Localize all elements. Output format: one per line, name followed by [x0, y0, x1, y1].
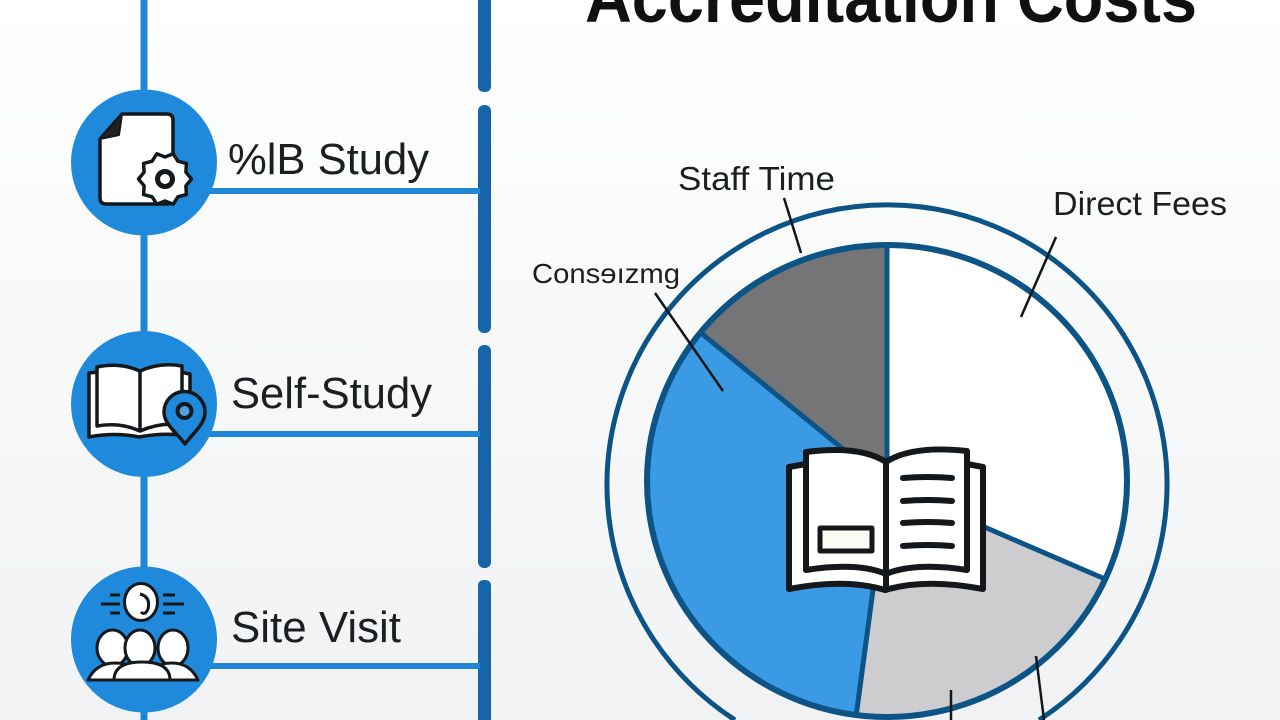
leader lines: [655, 198, 1056, 720]
step label: Site Visit: [231, 603, 401, 652]
icon: open book: [789, 449, 983, 590]
pie slice: light gray: [859, 530, 1102, 714]
icon: document with gear: [100, 114, 192, 204]
slice dividers: [701, 245, 1105, 717]
step label: Self-Study: [231, 369, 432, 418]
connector line: [205, 663, 480, 669]
step label: %lB Study: [228, 135, 429, 184]
step circle: [71, 566, 217, 712]
connector line: [205, 431, 480, 437]
pie slice: dark gray: [704, 248, 884, 458]
pie slices: [650, 248, 1124, 714]
segmented vertical divider: [478, 0, 491, 720]
icon: open book with location pin: [89, 365, 205, 444]
label: direct fees: Direct Fees: [1053, 185, 1227, 222]
step circle: [71, 90, 217, 236]
inner ring: [647, 245, 1127, 717]
label: staff time: Staff Time: [678, 160, 835, 197]
step circle: [71, 331, 217, 477]
outer ring: [607, 205, 1167, 720]
icon: group of people: [88, 584, 198, 680]
connector line: [205, 188, 480, 194]
step: site visit: [71, 566, 480, 712]
step: self study document: [71, 90, 480, 236]
panel: accreditation process timeline: [71, 0, 491, 720]
pie slice: blue: [650, 336, 870, 712]
panel: cost pie chart: [534, 166, 1226, 720]
timeline spine: [140, 0, 148, 720]
label: consulting: Consɘızmg: [532, 258, 680, 289]
step: self-study review: [71, 331, 480, 477]
pie slice: direct fees: [890, 370, 1124, 576]
